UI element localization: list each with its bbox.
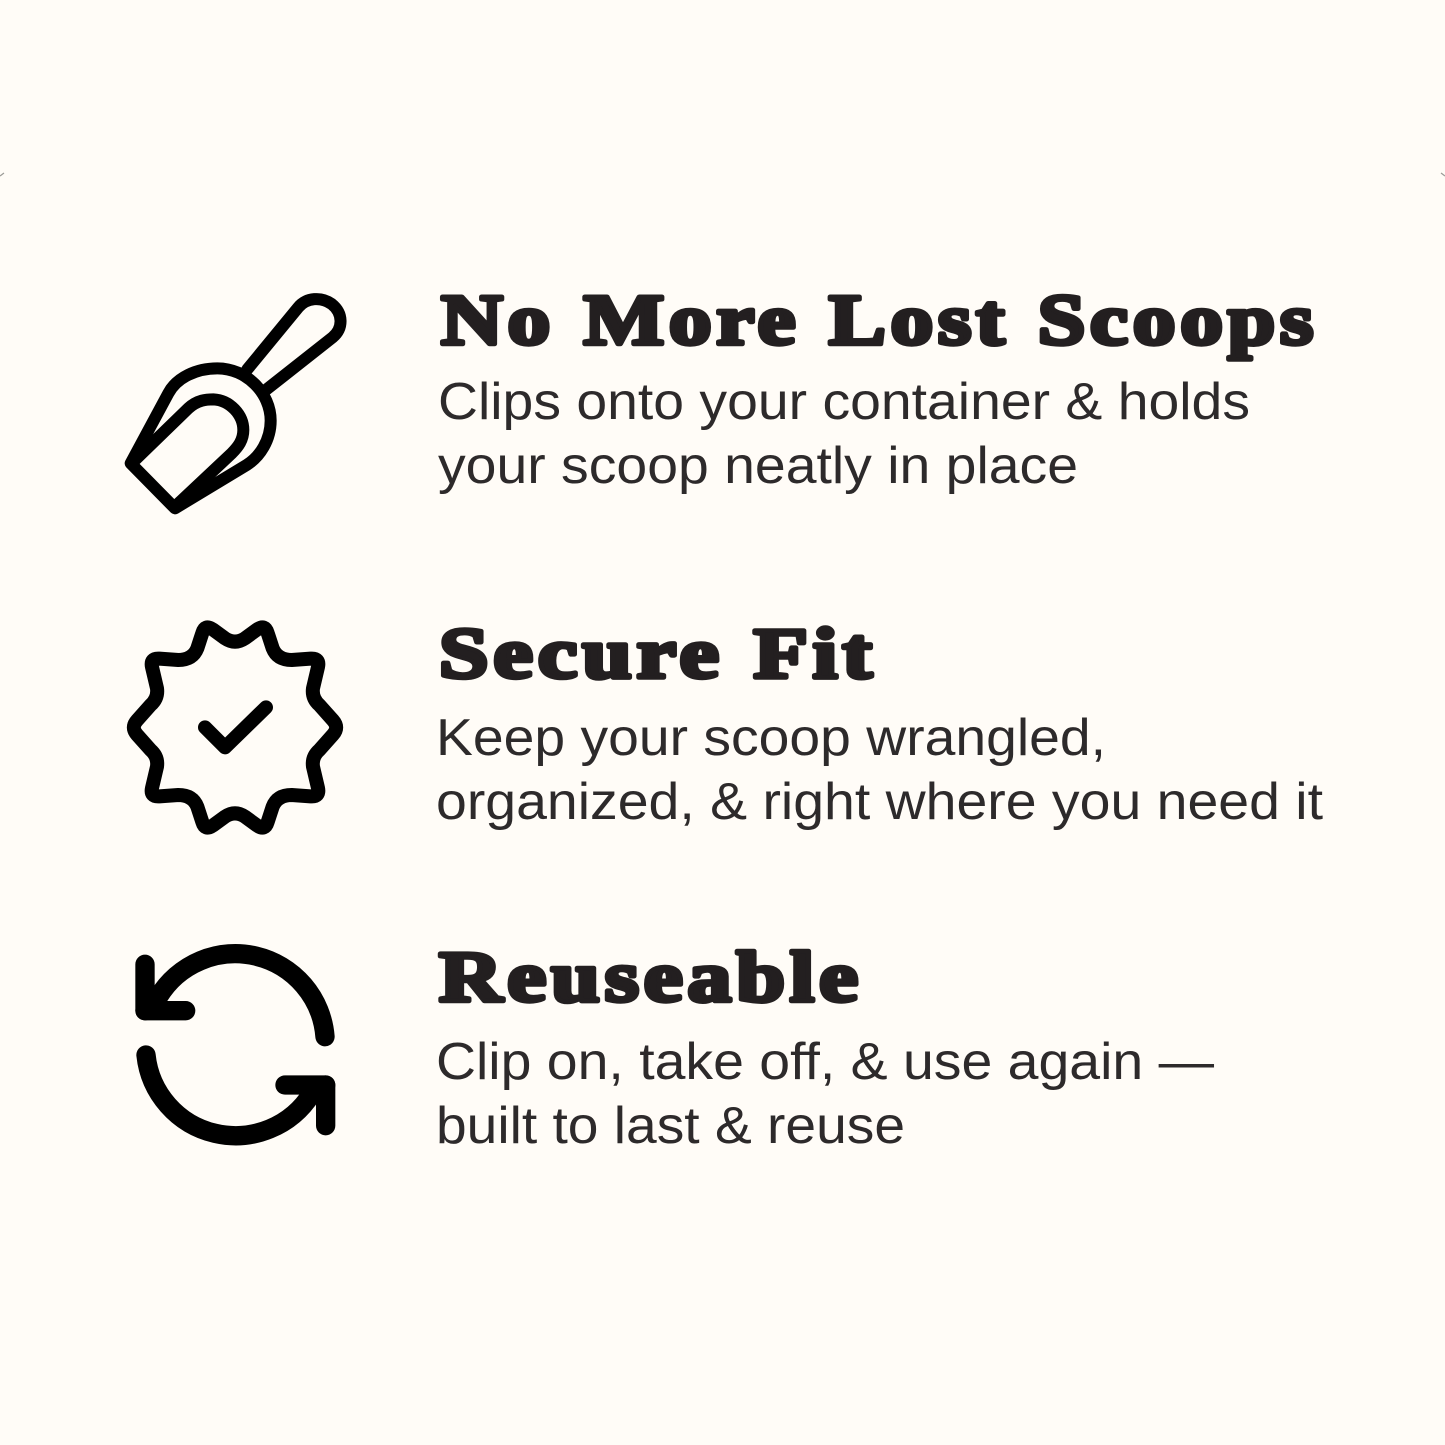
heading: secure fit: Secure Fit bbox=[439, 614, 877, 694]
feature row: reuseable bbox=[145, 937, 1214, 1155]
feature row: no more lost scoops bbox=[131, 280, 1318, 508]
text: no more lost scoops description: your scoop neatly in place bbox=[438, 437, 1078, 495]
text: reuseable description bbox=[436, 1033, 1214, 1155]
text: secure fit description: Keep your scoop wrangled, bbox=[436, 709, 1106, 767]
text: no more lost scoops description bbox=[438, 373, 1250, 495]
heading: reuseable: Reuseable bbox=[439, 937, 863, 1017]
text: reuseable description: Clip on, take off, & use again — bbox=[436, 1033, 1214, 1091]
text: reuseable description: built to last & reuse bbox=[436, 1097, 905, 1155]
icon: badge with check mark bbox=[134, 627, 336, 828]
text: secure fit description bbox=[436, 709, 1324, 831]
icon: scoop bbox=[131, 299, 341, 508]
heading: no more lost scoops: No More Lost Scoops bbox=[441, 280, 1318, 360]
text: secure fit description: organized, & right where you need it bbox=[436, 773, 1324, 831]
feature row: secure fit bbox=[134, 614, 1324, 831]
icon: refresh arrows bbox=[145, 954, 326, 1136]
text: no more lost scoops description: Clips onto your container & holds bbox=[438, 373, 1250, 431]
